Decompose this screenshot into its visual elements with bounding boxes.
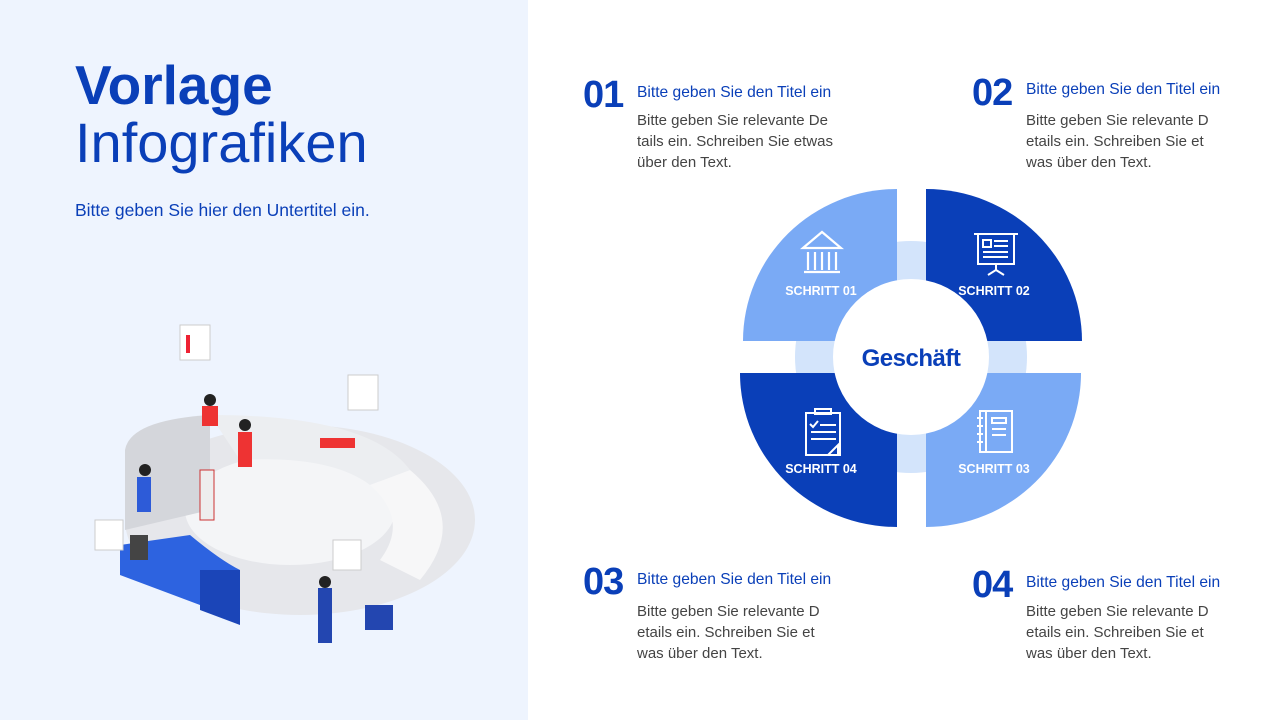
text: was über den Text. [1026, 645, 1152, 662]
step 02 text [972, 72, 1220, 171]
text: über den Text. [637, 154, 732, 171]
step 03 text [583, 561, 831, 662]
text: 03 [583, 561, 623, 603]
text: 01 [583, 74, 623, 116]
text: tails ein. Schreiben Sie etwas [637, 133, 833, 150]
text: Bitte geben Sie relevante D [1026, 112, 1209, 129]
text: Bitte geben Sie den Titel ein [637, 571, 831, 588]
text: 04 [972, 564, 1012, 606]
title [75, 54, 368, 174]
text: etails ein. Schreiben Sie et [1026, 133, 1204, 150]
text: etails ein. Schreiben Sie et [637, 624, 815, 641]
center circle: Geschäft [862, 345, 961, 372]
quadrant 04: SCHRITT 04 [785, 462, 857, 476]
title: Infografiken [75, 111, 368, 174]
left panel background [0, 0, 528, 720]
text: Bitte geben Sie relevante De [637, 112, 828, 129]
quadrant 01 [743, 189, 897, 341]
icon: notebook [977, 411, 1012, 452]
quadrant 02 [926, 189, 1082, 341]
center circle [833, 279, 989, 435]
text: was über den Text. [637, 645, 763, 662]
text: Bitte geben Sie den Titel ein [1026, 574, 1220, 591]
text: 02 [972, 72, 1012, 114]
text: Bitte geben Sie den Titel ein [1026, 81, 1220, 98]
icon: clipboard [806, 409, 840, 455]
quadrant 01: SCHRITT 01 [785, 284, 857, 298]
step 04 text [972, 564, 1220, 662]
illustration: isometric chart with people [94, 324, 475, 643]
quadrant 03 [926, 373, 1081, 527]
title: Vorlage [75, 54, 273, 116]
text: Bitte geben Sie den Titel ein [637, 84, 831, 101]
step 01 text [583, 74, 833, 171]
quadrant 04 [740, 373, 897, 527]
subtitle: Bitte geben Sie hier den Untertitel ein. [75, 200, 370, 220]
text: etails ein. Schreiben Sie et [1026, 624, 1204, 641]
quadrant 02: SCHRITT 02 [958, 284, 1030, 298]
quadrant 03: SCHRITT 03 [958, 462, 1030, 476]
text: was über den Text. [1026, 154, 1152, 171]
icon: presentation board [974, 234, 1018, 275]
icon: bank [803, 232, 841, 272]
text: Bitte geben Sie relevante D [637, 603, 820, 620]
text: Bitte geben Sie relevante D [1026, 603, 1209, 620]
